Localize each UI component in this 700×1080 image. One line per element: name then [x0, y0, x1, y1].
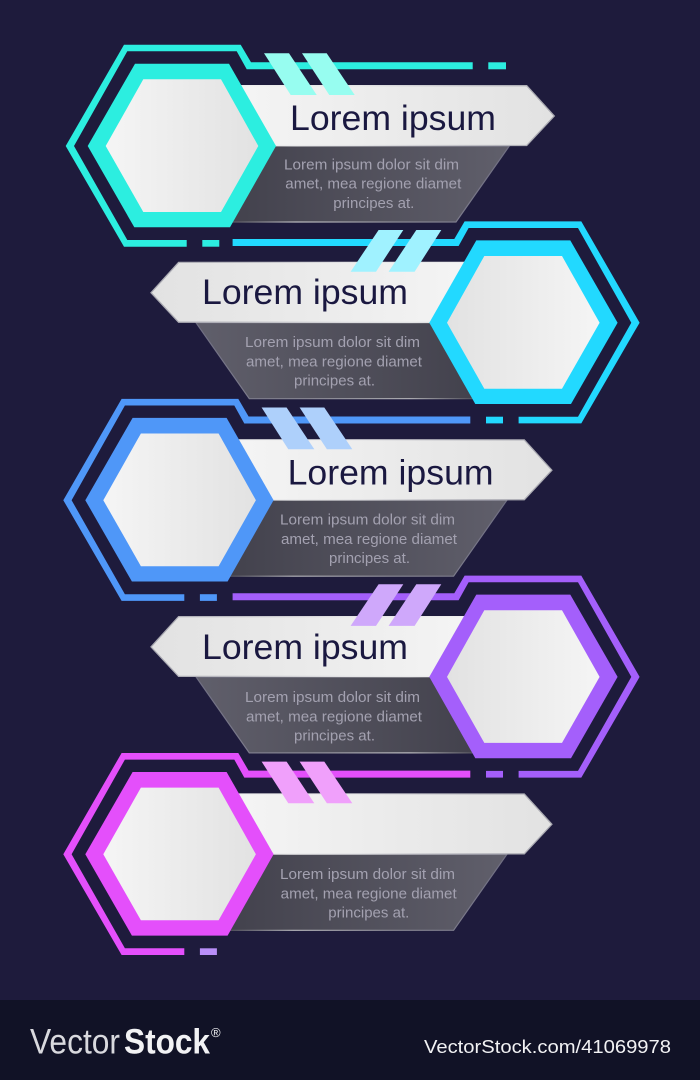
hexagon ring: [429, 240, 618, 404]
body text: principes at.: [294, 729, 375, 745]
body text: principes at.: [328, 906, 409, 922]
hexagon placeholder: [447, 610, 600, 743]
body text: principes at.: [333, 196, 414, 212]
heading: Lorem ipsum: [202, 273, 408, 312]
description panel: [223, 854, 507, 930]
body text: amet, mea regione diamet: [281, 886, 457, 902]
outer outline: [63, 399, 470, 601]
hexagon ring: [88, 64, 276, 227]
bottom dash: [200, 948, 217, 955]
title banner: [230, 86, 554, 146]
title banner: [151, 617, 475, 676]
slashes: [264, 53, 355, 95]
body text: Lorem ipsum dolor sit dim: [280, 512, 455, 528]
outer outline: [63, 753, 470, 955]
panel: magenta row: [63, 753, 552, 955]
logo: Vector: [30, 1022, 120, 1061]
outer outline: [233, 221, 640, 423]
panel: purple row: [151, 576, 640, 778]
bottom dash: [486, 771, 503, 778]
slashes: [351, 230, 441, 272]
panel: teal row: [66, 45, 554, 247]
title banner: [151, 262, 475, 322]
mirrored shapes: [151, 221, 640, 423]
outer outline: [66, 45, 473, 247]
shifted shapes: [63, 399, 552, 601]
bottom dash: [200, 594, 217, 601]
bottom dash: [202, 240, 219, 247]
body text: Lorem ipsum dolor sit dim: [284, 157, 459, 173]
image id: VectorStock.com/41069978: [424, 1037, 671, 1057]
hexagon ring: [85, 772, 274, 936]
body text: Lorem ipsum dolor sit dim: [245, 690, 420, 706]
outer outline: [233, 576, 640, 778]
panel: blue row: [63, 399, 552, 601]
panel: cyan row: [151, 221, 640, 423]
description panel: [225, 146, 509, 222]
slashes: [262, 762, 352, 803]
title banner: [228, 440, 552, 500]
description panel: [196, 323, 480, 399]
mirrored shapes: [151, 576, 640, 778]
logo: Stock: [124, 1022, 210, 1061]
body text: amet, mea regione diamet: [246, 709, 422, 725]
hexagon ring: [429, 595, 618, 758]
body text: [280, 867, 457, 922]
hexagon placeholder: [106, 79, 258, 212]
body text: [245, 690, 422, 745]
logo: ®: [211, 1025, 221, 1040]
heading: Lorem ipsum: [290, 99, 496, 138]
body text: amet, mea regione diamet: [246, 354, 422, 370]
body text: amet, mea regione diamet: [285, 177, 461, 193]
slashes: [262, 408, 352, 449]
heading: Lorem ipsum: [202, 628, 408, 667]
body text: amet, mea regione diamet: [281, 532, 457, 548]
body text: [280, 512, 457, 567]
hexagon placeholder: [103, 434, 256, 566]
hexagon ring: [85, 418, 274, 582]
description panel: [223, 500, 507, 576]
hexagon placeholder: [103, 788, 256, 920]
footer bar: [0, 1000, 700, 1080]
slashes: [351, 584, 441, 626]
body text: [245, 335, 422, 390]
body text: Lorem ipsum dolor sit dim: [245, 335, 420, 351]
title banner: [228, 794, 552, 854]
bottom dash: [486, 417, 503, 423]
body text: principes at.: [294, 374, 375, 390]
heading: Lorem ipsum: [288, 454, 494, 492]
hexagon placeholder: [447, 256, 600, 389]
body text: [284, 157, 461, 212]
shifted shapes: [63, 753, 552, 955]
description panel: [196, 677, 480, 753]
body text: Lorem ipsum dolor sit dim: [280, 867, 455, 883]
top dash: [488, 62, 506, 69]
body text: principes at.: [329, 551, 410, 567]
